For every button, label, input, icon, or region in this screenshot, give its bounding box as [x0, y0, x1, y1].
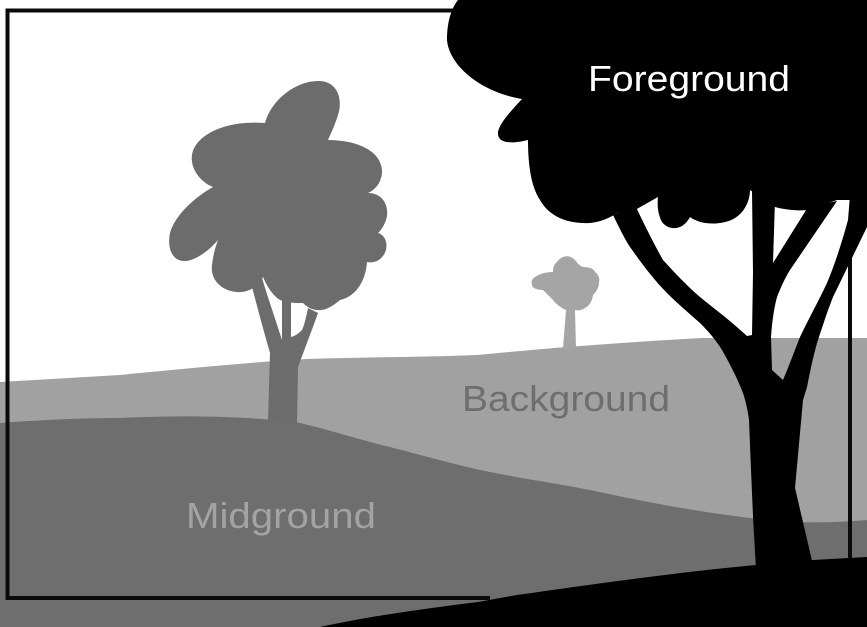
- background label: Background: [462, 378, 670, 419]
- foreground tree: [447, 0, 867, 570]
- midground tree trunk: [252, 278, 318, 424]
- midground tree canopy: [169, 81, 387, 310]
- foreground ground: [320, 557, 867, 627]
- foreground tree canopy: [447, 0, 867, 228]
- midground hill: [0, 416, 867, 627]
- foreground label: Foreground: [588, 58, 790, 99]
- frame right edge: [848, 250, 852, 562]
- midground tree: [169, 81, 387, 424]
- background hill: [0, 338, 867, 560]
- midground label: Midground: [186, 495, 376, 536]
- foreground tree trunk and branches: [613, 190, 867, 570]
- background tree: [532, 256, 599, 348]
- frame: [8, 10, 490, 598]
